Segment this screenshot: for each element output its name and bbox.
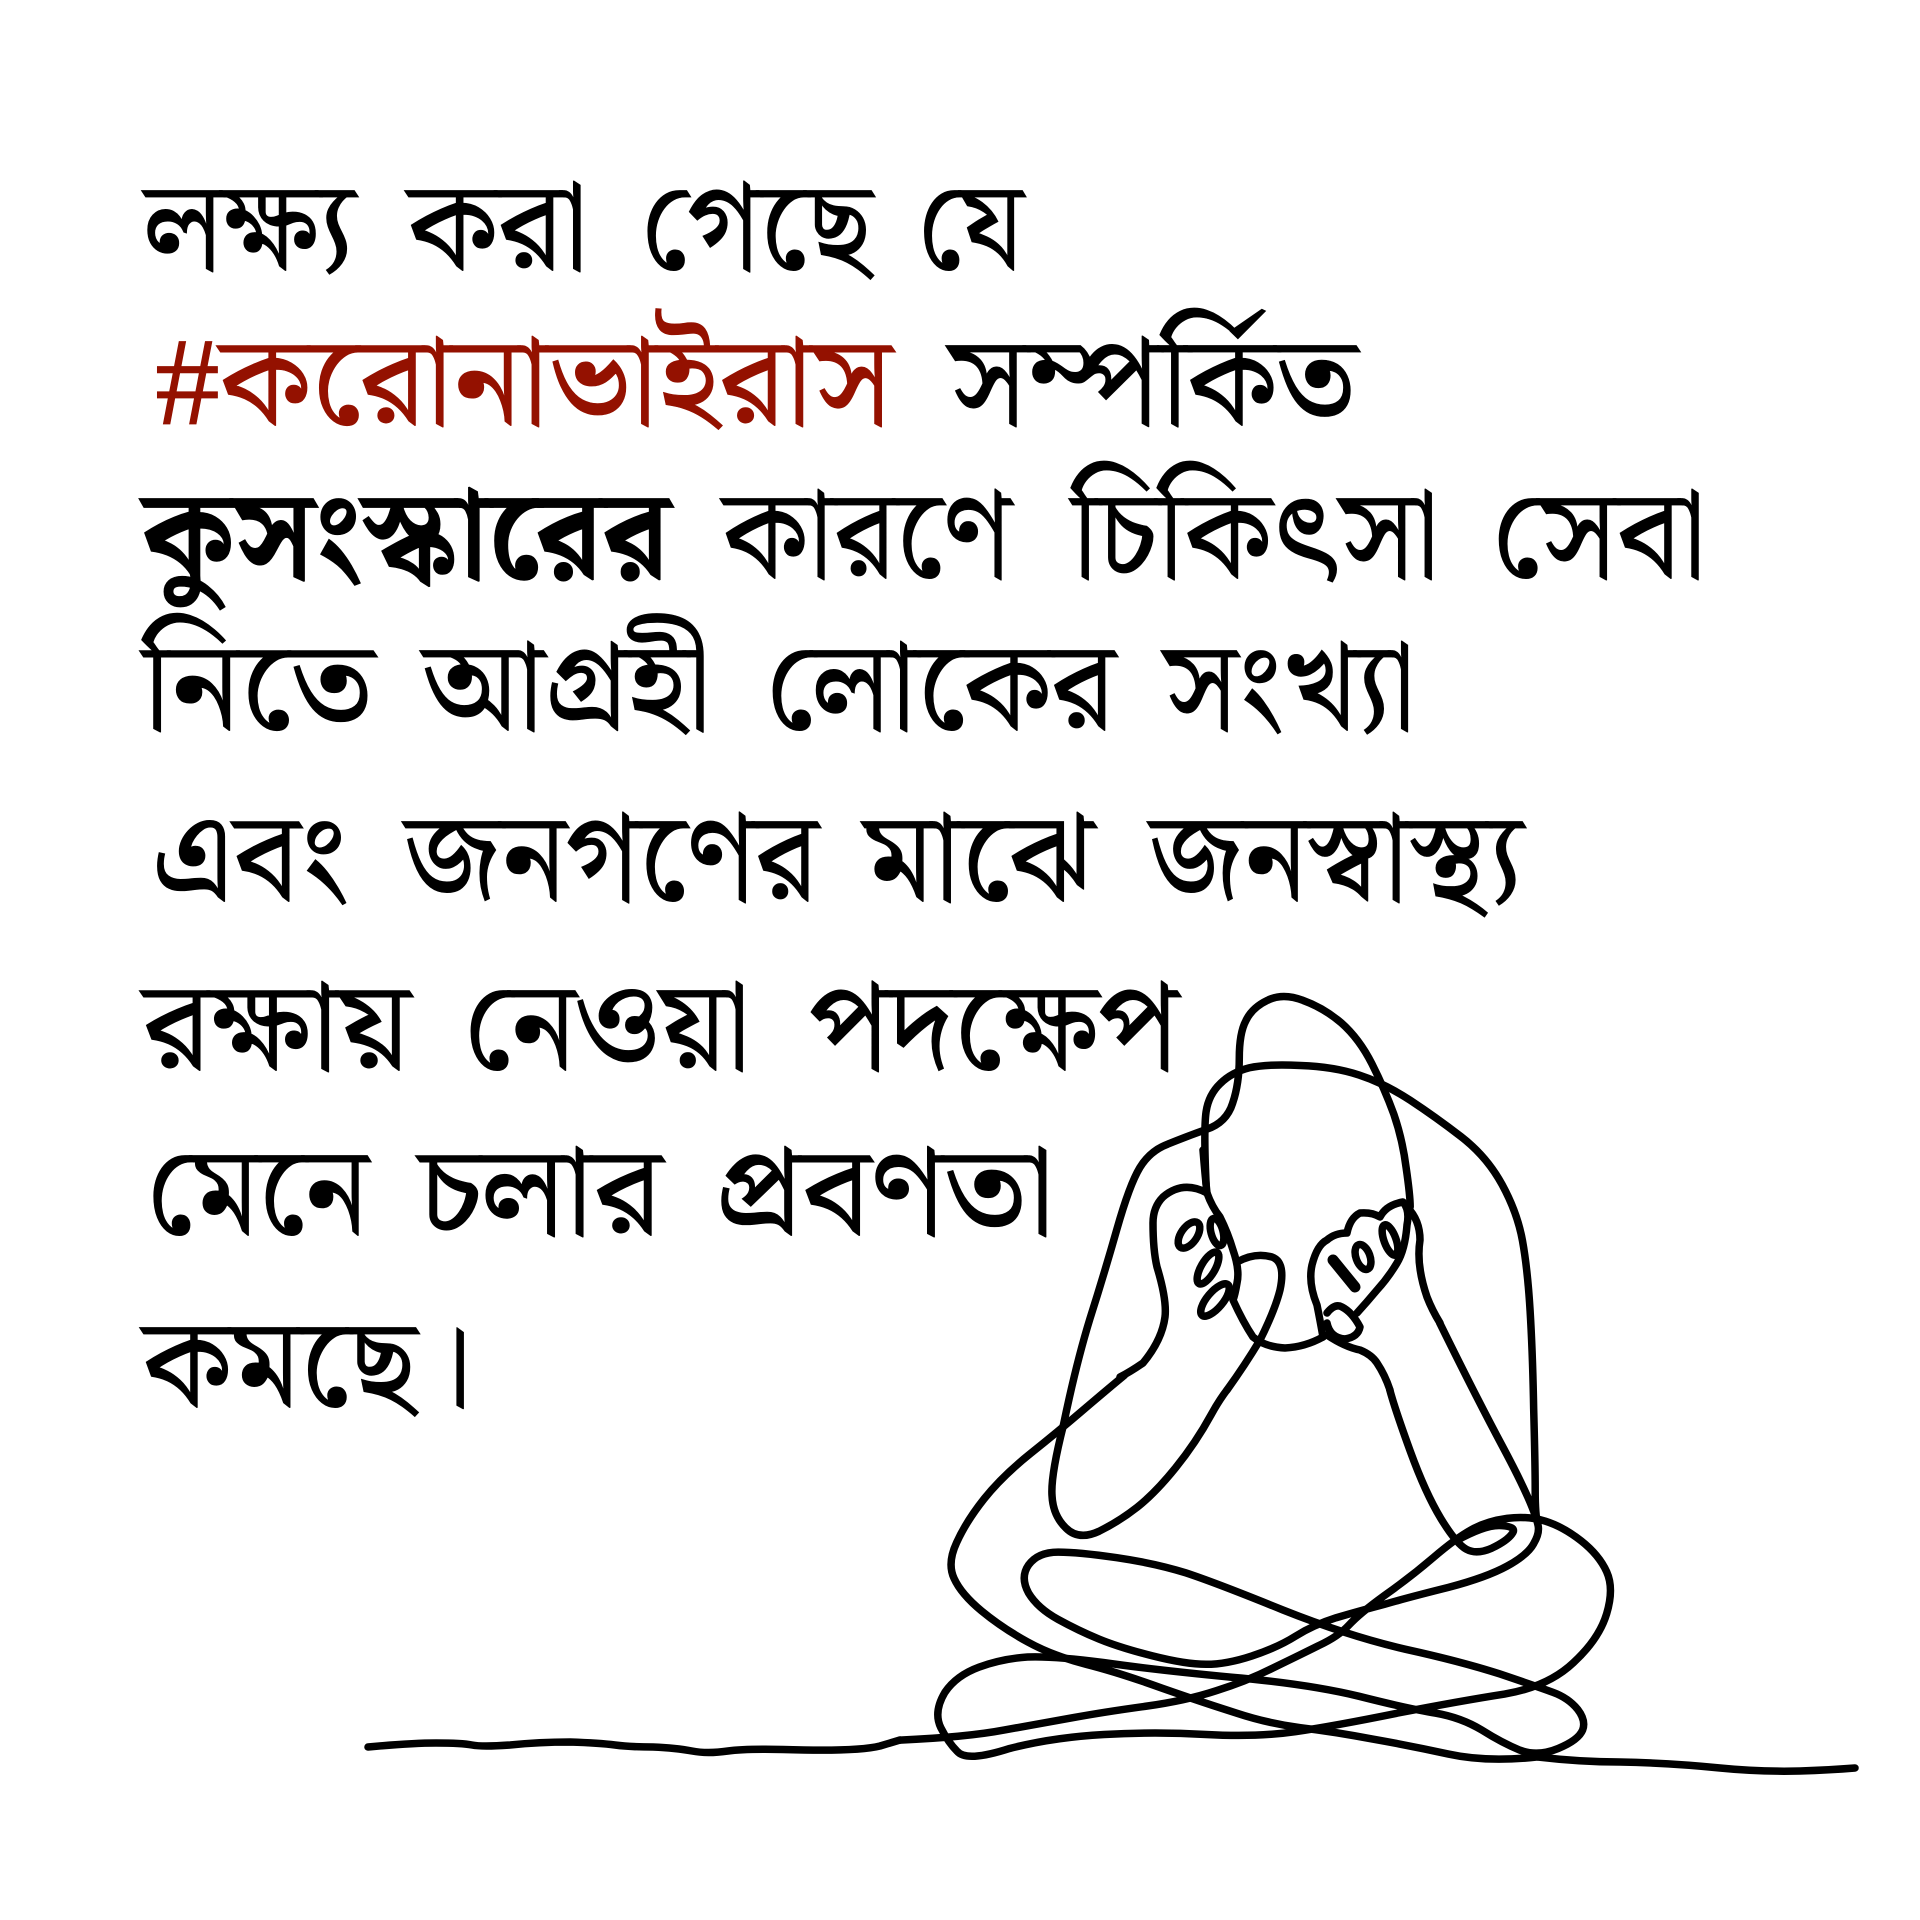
text line 3 with bold word: চিকিৎসা bbox=[1068, 461, 1439, 605]
text line 5: জনস্বাস্থ্য bbox=[1146, 789, 1527, 928]
text line 4: লোকের bbox=[765, 618, 1120, 757]
right arm strand bbox=[1440, 1323, 1535, 1516]
text line 5: মাঝে bbox=[860, 789, 1098, 928]
text line 4: সংখ্যা bbox=[1160, 618, 1415, 757]
ground line right bbox=[1538, 1757, 1855, 1771]
text line 6: পদক্ষেপ bbox=[809, 958, 1183, 1097]
text line 1: যে bbox=[917, 158, 1026, 297]
text line 1: গেছে bbox=[640, 158, 876, 297]
text line 7: চলার bbox=[415, 1123, 667, 1262]
body strands bbox=[900, 996, 1610, 1759]
text line 3 with bold word: সেবা bbox=[1491, 466, 1706, 605]
text line 8: কমছে। bbox=[139, 1295, 475, 1434]
text line 6: নেওয়া bbox=[463, 958, 750, 1097]
text line 4: আগ্রহী bbox=[419, 613, 711, 757]
text line 1: লক্ষ্য bbox=[141, 158, 359, 297]
left arm and head strand bbox=[1063, 996, 1410, 1426]
text line 5: জনগণের bbox=[401, 789, 822, 928]
text line 7 bbox=[146, 1123, 1054, 1262]
right palm base bbox=[1327, 1306, 1390, 1390]
left hand contour bbox=[1120, 1187, 1207, 1377]
illustration: one-line drawing of a distressed seated person bbox=[368, 996, 1855, 1771]
right forearm strand bbox=[1390, 1390, 1514, 1552]
left fingers bbox=[1174, 1218, 1204, 1252]
hands and chin bbox=[1120, 1150, 1440, 1390]
text line 4: নিতে bbox=[139, 613, 379, 757]
text line 1 bbox=[141, 158, 1026, 297]
text line 3 with bold word: কুসংস্কারের bbox=[138, 466, 675, 612]
text line 2 with red hashtag: সম্পর্কিত bbox=[945, 308, 1361, 452]
right fingers bbox=[1333, 1260, 1355, 1287]
text line 2 with red hashtag: #করোনাভাইরাস bbox=[155, 307, 897, 452]
text line 6: রক্ষায় bbox=[139, 958, 414, 1097]
left elbow strand bbox=[1052, 1390, 1227, 1535]
text line 5: এবং bbox=[151, 789, 349, 928]
right hand contour bbox=[1311, 1202, 1408, 1337]
text block: main message bbox=[138, 158, 1706, 1434]
left forearm bbox=[1227, 1255, 1282, 1390]
left thigh and shoulder strand bbox=[951, 1375, 1538, 1759]
chin line bbox=[1203, 1150, 1323, 1348]
text line 5 bbox=[151, 789, 1527, 928]
wrist bbox=[1407, 1207, 1440, 1323]
ground line left bbox=[368, 1740, 900, 1752]
text line 3 with bold word bbox=[138, 461, 1706, 612]
text line 4 bbox=[139, 613, 1415, 757]
legs and hips strand bbox=[900, 1065, 1610, 1756]
text line 6 bbox=[139, 958, 1183, 1097]
text line 2 with red hashtag bbox=[155, 307, 1361, 452]
text line 7: মেনে bbox=[146, 1123, 372, 1262]
text line 3 with bold word: কারণে bbox=[719, 466, 1015, 605]
text line 1: করা bbox=[404, 158, 588, 297]
text line 7: প্রবণতা bbox=[715, 1123, 1054, 1262]
